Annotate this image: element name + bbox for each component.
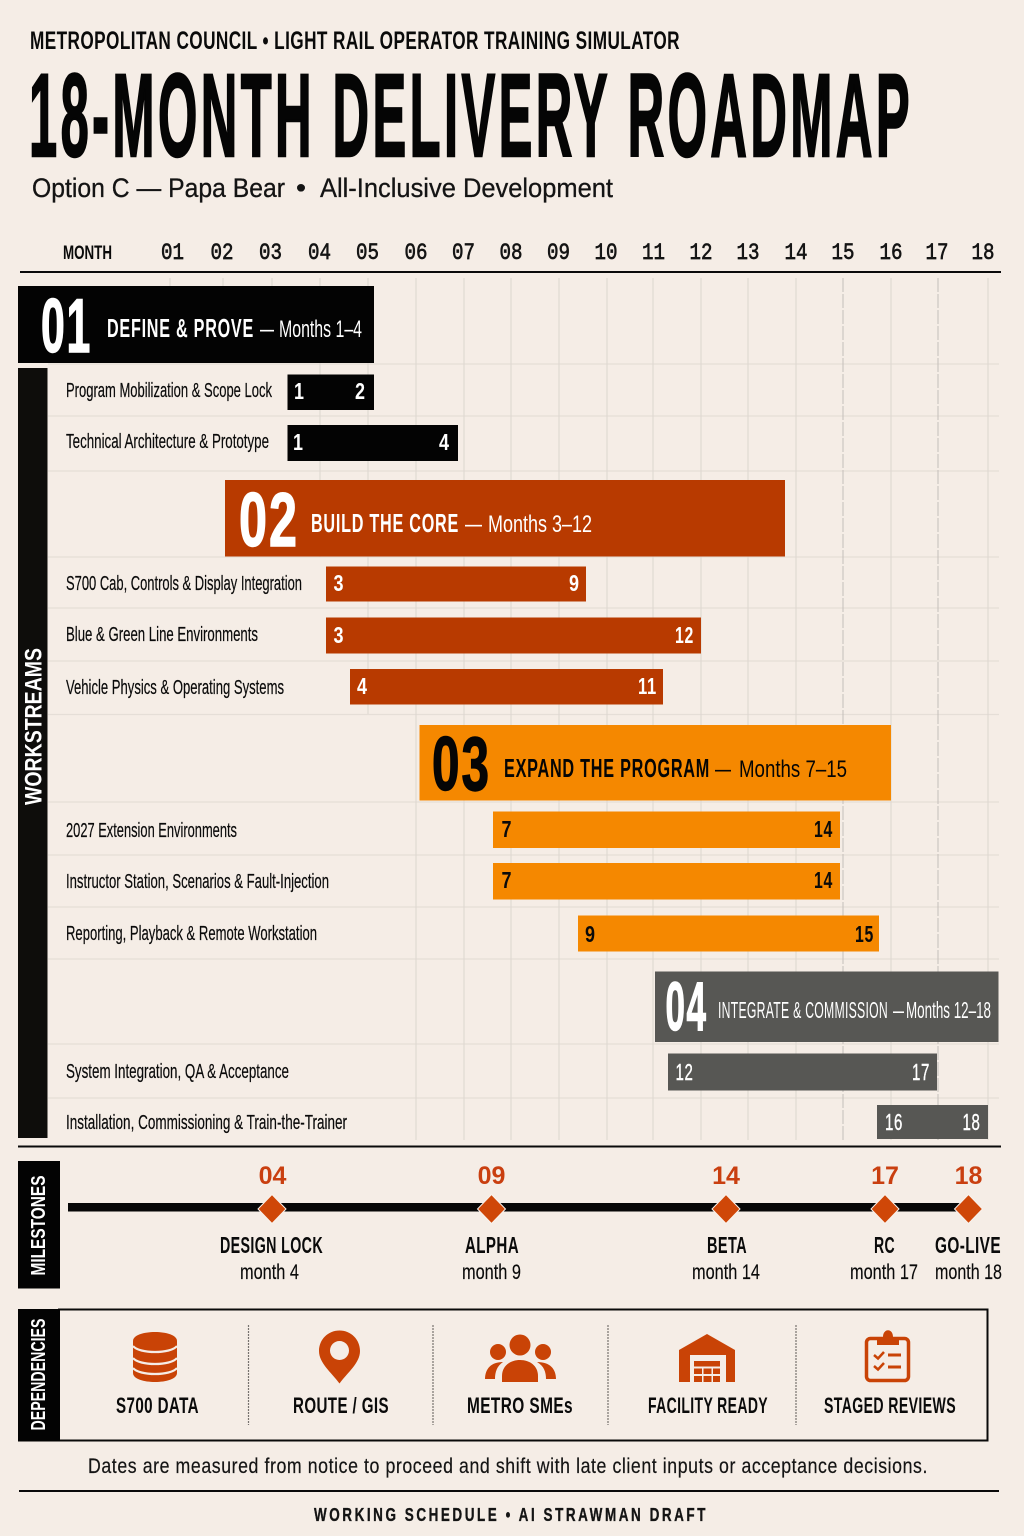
dependency: metro smes	[467, 1334, 573, 1418]
phase 02 header: Months 3–12	[488, 511, 592, 538]
phase 02 header: BUILD THE CORE	[311, 508, 459, 538]
task: instructor station: 14	[814, 867, 833, 893]
subtitle: •	[296, 173, 306, 203]
phase 01 header: Months 1–4	[279, 316, 362, 343]
task: installation commissioning: 18	[962, 1109, 980, 1135]
task: blue and green line: 12	[675, 622, 694, 648]
task: reporting playback: 15	[855, 921, 874, 947]
milestone: rc: RC	[874, 1232, 895, 1258]
month axis: 05	[356, 240, 379, 266]
milestone: alpha: month 9	[462, 1261, 521, 1284]
month axis: 03	[259, 240, 282, 266]
task: 2027 extension	[66, 812, 840, 848]
phase 01 header	[18, 284, 374, 369]
task: s700 cab	[66, 566, 586, 602]
task: reporting playback: Reporting, Playback & Remote Workstation	[66, 922, 317, 945]
task: 2027 extension: 14	[814, 816, 833, 842]
task: reporting playback: 9	[585, 921, 595, 947]
month axis: 14	[784, 240, 808, 266]
phase 03 header: Months 7–15	[739, 756, 847, 783]
task: program mobilization	[66, 374, 374, 410]
dependency: metro smes: METRO SMEs	[467, 1393, 573, 1418]
task: s700 cab: S700 Cab, Controls & Display Integration	[66, 572, 302, 595]
milestone: rc: month 17	[850, 1261, 918, 1284]
task: technical architecture: 1	[293, 429, 303, 455]
month axis: 04	[308, 240, 331, 266]
milestone: design lock	[220, 1162, 323, 1284]
milestone: alpha	[462, 1162, 521, 1284]
month axis: 11	[642, 240, 665, 266]
task: reporting playback	[66, 916, 879, 952]
task: s700 cab: 9	[569, 570, 579, 596]
task: technical architecture	[66, 425, 458, 461]
task: system integration	[66, 1054, 937, 1090]
icon: people	[485, 1334, 556, 1382]
dependency: s700 data	[116, 1332, 199, 1418]
task: vehicle physics	[66, 669, 663, 704]
phase 03 header: 03	[432, 722, 491, 807]
milestone: alpha: ALPHA	[465, 1232, 519, 1258]
milestone: beta	[692, 1162, 760, 1284]
task: blue and green line: 3	[334, 622, 344, 648]
task: installation commissioning: 16	[885, 1109, 903, 1135]
phase 01 header: 01	[41, 284, 92, 369]
footer: WORKING SCHEDULE • AI STRAWMAN DRAFT	[314, 1504, 708, 1525]
month axis: 06	[404, 240, 428, 266]
task: 2027 extension: 2027 Extension Environments	[66, 819, 237, 842]
task: instructor station: 7	[502, 867, 512, 893]
phase 04 header	[655, 968, 998, 1045]
phase 04 header: 04	[666, 968, 708, 1045]
task: blue and green line	[66, 618, 701, 654]
dependency: facility ready	[648, 1334, 768, 1418]
task: vehicle physics: Vehicle Physics & Operating Systems	[66, 676, 284, 699]
dependencies label: DEPENDENCIES	[27, 1318, 50, 1430]
header block	[29, 27, 913, 203]
task: vehicle physics: 11	[638, 673, 657, 699]
subtitle: All-Inclusive Development	[320, 173, 613, 203]
milestone: design lock: 04	[259, 1162, 286, 1190]
task: installation commissioning: Installation, Commissioning & Train-the-Trainer	[66, 1111, 347, 1134]
milestone: alpha: 09	[478, 1162, 505, 1190]
month axis: 01	[161, 240, 184, 266]
task: system integration: System Integration, QA & Acceptance	[66, 1060, 289, 1083]
milestone: beta: month 14	[692, 1261, 760, 1284]
month axis: 17	[926, 240, 948, 266]
phase 04 header: —	[893, 997, 904, 1023]
milestone: rc: 17	[871, 1162, 899, 1190]
month axis: MONTH	[63, 243, 112, 264]
task: vehicle physics: 4	[357, 673, 367, 699]
icon: database	[133, 1332, 177, 1382]
milestone: design lock: DESIGN LOCK	[220, 1232, 323, 1258]
milestone: go-live: 18	[955, 1162, 982, 1190]
dependency: route gis	[293, 1330, 389, 1418]
phase 01 header: —	[260, 316, 274, 343]
milestone: rc	[850, 1162, 918, 1284]
task: installation commissioning	[66, 1105, 988, 1139]
month axis: 18	[972, 240, 994, 266]
month axis: 07	[452, 240, 475, 266]
dependency: staged reviews	[824, 1330, 956, 1418]
phase 02 header	[225, 478, 785, 563]
milestone: beta: BETA	[707, 1232, 747, 1258]
milestone: beta: 14	[712, 1162, 740, 1190]
month axis: 15	[832, 240, 854, 266]
month axis	[20, 240, 1001, 273]
milestones label: MILESTONES	[27, 1176, 50, 1276]
task: blue and green line: Blue & Green Line Environments	[66, 623, 258, 646]
task: technical architecture: Technical Architecture & Prototype	[66, 430, 269, 453]
phase 03 header	[420, 722, 891, 807]
icon: garage	[679, 1334, 735, 1382]
task: 2027 extension: 7	[502, 816, 512, 842]
subtitle: Option C — Papa Bear	[32, 173, 285, 203]
month axis: 08	[500, 240, 522, 266]
month axis: 13	[736, 240, 760, 266]
dependency: s700 data: S700 DATA	[116, 1393, 199, 1418]
month axis: 02	[210, 240, 234, 266]
month axis: 16	[880, 240, 902, 266]
milestones label	[18, 1161, 60, 1288]
milestone timeline line	[68, 1203, 968, 1212]
month axis: 10	[594, 240, 618, 266]
dependencies label	[18, 1309, 60, 1442]
month axis: 12	[690, 240, 712, 266]
task: system integration: 17	[912, 1059, 930, 1085]
subtitle	[32, 173, 613, 203]
dependencies panel	[18, 1309, 988, 1442]
eyebrow: METROPOLITAN COUNCIL • LIGHT RAIL OPERATOR TRAINING SIMULATOR	[30, 27, 680, 55]
task: program mobilization: 2	[355, 378, 365, 404]
phase 02 header: —	[465, 511, 482, 538]
task: program mobilization: 1	[294, 378, 304, 404]
milestones panel	[18, 1161, 1002, 1288]
dependency: route gis: ROUTE / GIS	[293, 1393, 389, 1418]
icon: map pin	[319, 1330, 360, 1384]
dependency: facility ready: FACILITY READY	[648, 1393, 768, 1418]
task: technical architecture: 4	[439, 429, 449, 455]
task: system integration: 12	[676, 1059, 694, 1085]
task: program mobilization: Program Mobilization & Scope Lock	[66, 379, 272, 402]
milestone: go-live	[935, 1162, 1002, 1284]
icon: clipboard checklist	[866, 1330, 908, 1380]
workstreams side label: WORKSTREAMS	[20, 648, 48, 805]
phase 03 header: EXPAND THE PROGRAM	[504, 753, 710, 783]
milestone: design lock: month 4	[240, 1261, 299, 1284]
task: instructor station: Instructor Station, Scenarios & Fault-Injection	[66, 870, 329, 893]
milestone: go-live: month 18	[935, 1261, 1002, 1284]
phase 01 header: DEFINE & PROVE	[107, 313, 254, 343]
phase 02 header: 02	[239, 478, 299, 563]
task: s700 cab: 3	[334, 570, 344, 596]
workstreams side label	[18, 368, 48, 1138]
month axis: 09	[547, 240, 570, 266]
phase 03 header: —	[715, 756, 731, 783]
task: instructor station	[66, 863, 840, 900]
